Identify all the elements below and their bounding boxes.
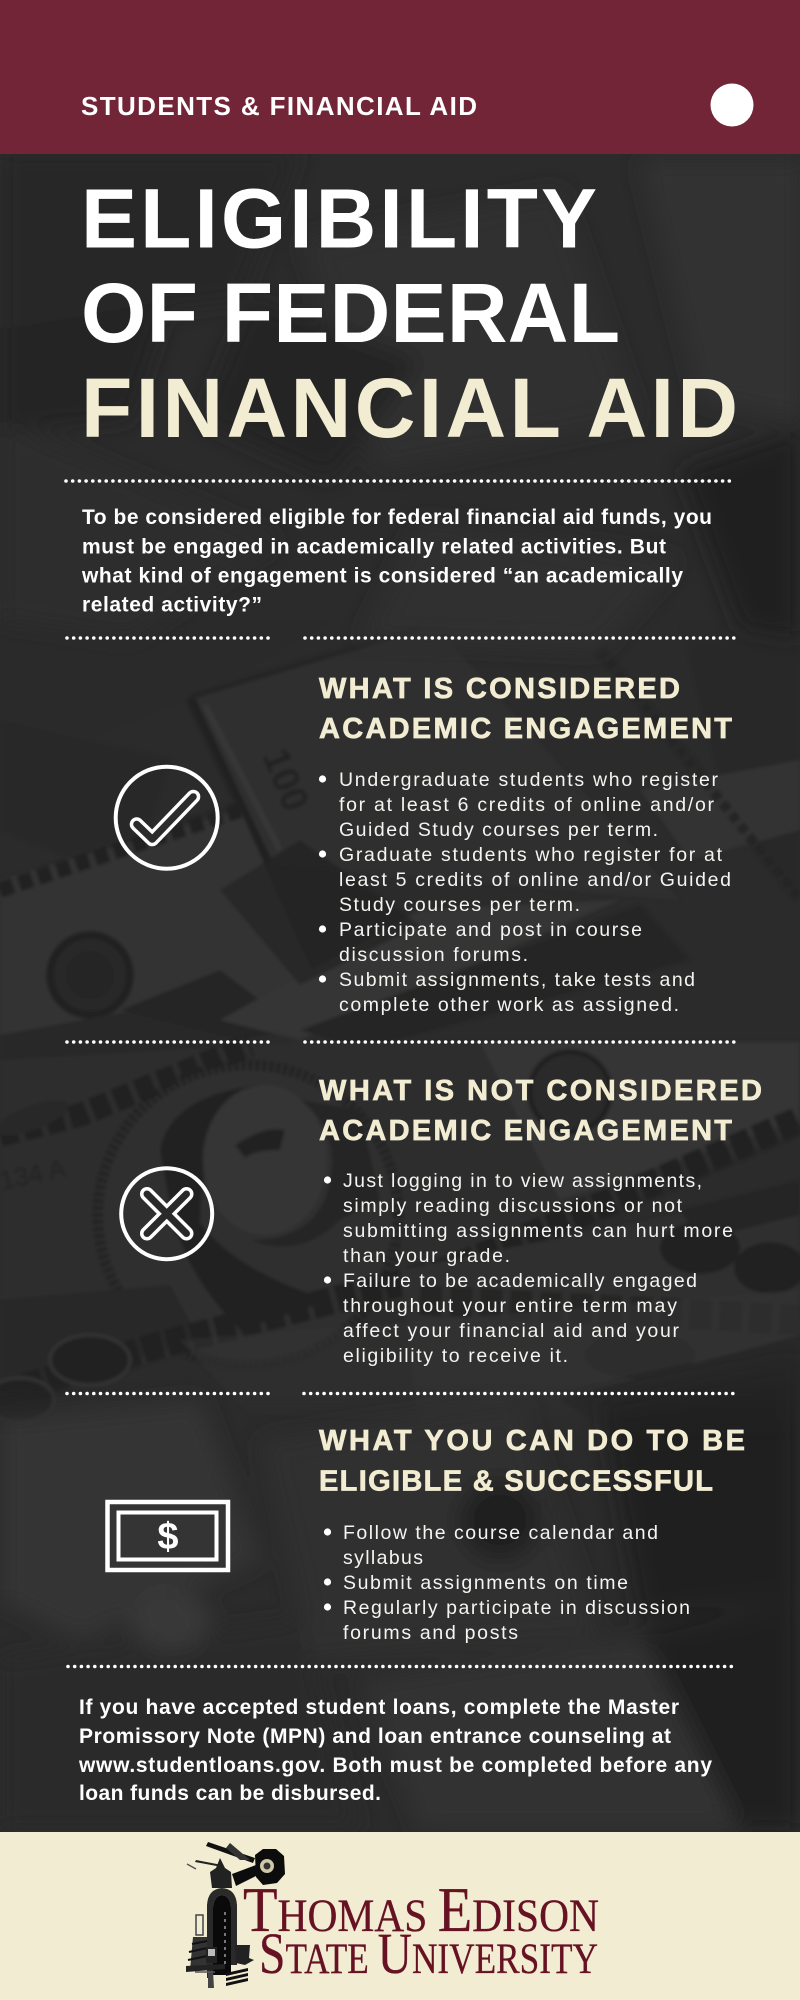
closing paragraph <box>78 1696 712 1805</box>
logo: university name <box>243 1874 599 1986</box>
bullet list: what you can do <box>324 1522 690 1644</box>
intro paragraph <box>81 506 712 616</box>
heading: what is not considered <box>319 1075 762 1147</box>
intro paragraph: related activity?” <box>82 594 262 616</box>
footer band <box>0 1832 800 2000</box>
bullet list: what you can do: Follow the course calendar and <box>343 1522 658 1544</box>
header label: STUDENTS & FINANCIAL AID <box>81 91 477 121</box>
heading: what you can do: WHAT YOU CAN DO TO BE <box>319 1425 745 1457</box>
bullet list: what you can do: syllabus <box>343 1547 423 1569</box>
bullet list: not considered <box>324 1170 733 1367</box>
heading: what you can do: ELIGIBLE & SUCCESSFUL <box>319 1466 713 1498</box>
bullet list: not considered: simply reading discussions or not <box>343 1195 683 1217</box>
heading: what is not considered: ACADEMIC ENGAGEMENT <box>319 1115 732 1147</box>
icon: dollar bill: $ <box>157 1516 179 1558</box>
bullet list: considered: Graduate students who register for at <box>339 844 723 866</box>
logo: building engraving <box>186 1842 285 1988</box>
header white circle <box>710 84 754 126</box>
heading: what is considered: ACADEMIC ENGAGEMENT <box>319 713 732 745</box>
header band <box>0 0 800 154</box>
bullet list: not considered: than your grade. <box>343 1245 510 1267</box>
bullet list: considered: Undergraduate students who register <box>339 769 718 791</box>
heading: what is not considered: WHAT IS NOT CONSIDERED <box>319 1075 762 1107</box>
background: dark banknote photo <box>0 436 800 1827</box>
bullet list: not considered: throughout your entire term may <box>343 1295 677 1317</box>
bullet list: considered <box>319 769 731 1016</box>
title: FINANCIAL AID <box>81 361 738 455</box>
bullet list: not considered: eligibility to receive it. <box>343 1345 568 1367</box>
intro paragraph: must be engaged in academically related activities. But <box>82 536 666 558</box>
panel: what is not considered <box>121 1075 762 1367</box>
title: ELIGIBILITY <box>81 172 597 266</box>
heading: what is considered: WHAT IS CONSIDERED <box>319 673 680 705</box>
bullet list: considered: Submit assignments, take tests and <box>339 969 695 991</box>
heading: what is considered <box>319 673 732 745</box>
heading: what you can do <box>319 1425 745 1498</box>
closing paragraph: loan funds can be disbursed. <box>79 1782 381 1805</box>
closing paragraph: www.studentloans.gov. Both must be completed before any <box>78 1754 712 1777</box>
icon: x in circle <box>121 1168 212 1259</box>
logo: university name: STATE UNIVERSITY <box>259 1921 598 1986</box>
intro paragraph: what kind of engagement is considered “an academically <box>81 564 683 588</box>
bullet list: what you can do: Regularly participate in discussion <box>343 1597 690 1619</box>
panel: what is considered <box>116 673 732 1016</box>
closing paragraph: If you have accepted student loans, complete the Master <box>79 1696 679 1719</box>
bullet list: what you can do: forums and posts <box>343 1622 518 1644</box>
title <box>81 172 738 455</box>
background: dark banknote photo: 100 <box>254 743 316 817</box>
bullet list: considered: least 5 credits of online and/or Guided <box>339 869 731 891</box>
logo: university name: THOMAS EDISON <box>243 1874 599 1945</box>
bullet list: considered: complete other work as assigned. <box>339 994 679 1016</box>
title: OF FEDERAL <box>81 266 620 360</box>
bullet list: considered: discussion forums. <box>339 944 528 966</box>
icon: dollar bill <box>108 1502 228 1570</box>
bullet list: considered: Guided Study courses per term. <box>339 819 658 841</box>
bullet list: not considered: Just logging in to view assignments, <box>343 1170 702 1192</box>
bullet list: considered: Participate and post in course <box>339 919 642 941</box>
bullet list: not considered: affect your financial aid and your <box>343 1320 680 1342</box>
closing paragraph: Promissory Note (MPN) and loan entrance counseling at <box>79 1725 671 1748</box>
intro paragraph: To be considered eligible for federal financial aid funds, you <box>82 506 712 529</box>
panel: what you can do <box>108 1425 745 1644</box>
bullet list: not considered: Failure to be academically engaged <box>343 1270 697 1292</box>
bullet list: considered: Study courses per term. <box>339 894 580 916</box>
icon: check mark in circle <box>116 767 218 869</box>
bullet list: what you can do: Submit assignments on time <box>343 1572 628 1594</box>
bullet list: considered: for at least 6 credits of online and/or <box>339 794 714 816</box>
bullet list: not considered: submitting assignments can hurt more <box>343 1220 733 1242</box>
